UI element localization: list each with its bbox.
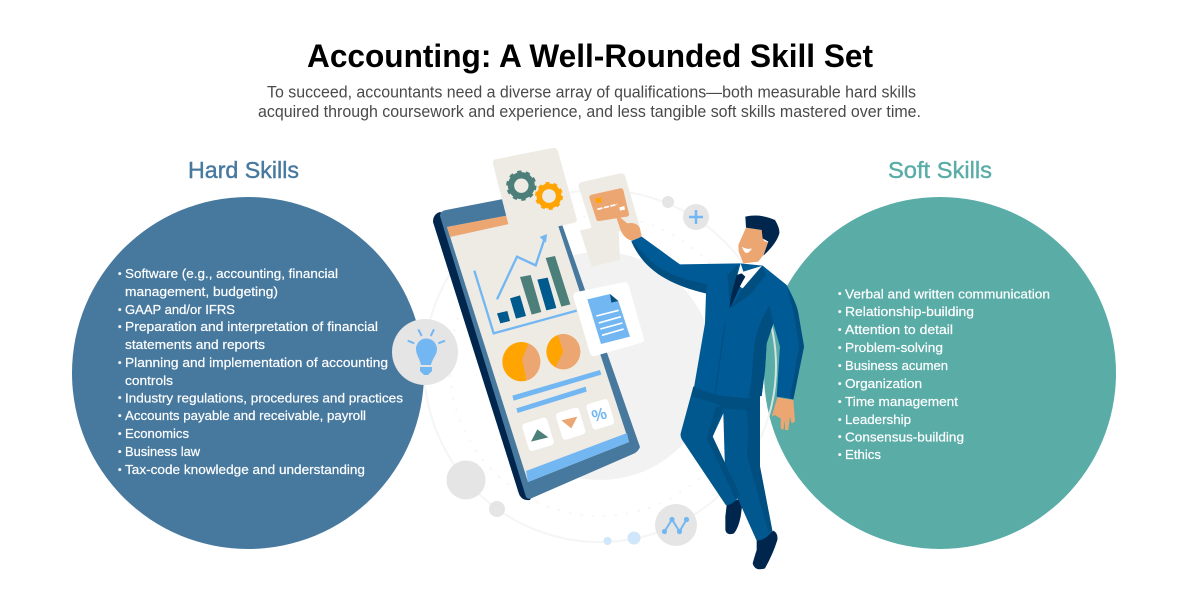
panel: hard skills circle [72,197,424,549]
subtitle: To succeed, accountants need a diverse array of qualifications—both measurable hard skills [267,84,916,102]
legs and shoes [681,387,777,569]
hard skills list: • [118,465,122,476]
hard skills list: • [118,322,122,333]
icon: credit card [589,188,629,221]
phone [433,190,640,500]
panel: soft skills circle [764,197,1116,549]
soft skills list: • [838,307,842,318]
bar chart [474,234,577,333]
hard skills list: • [118,447,122,458]
soft skills list: Consensus-building [845,430,964,444]
soft skills list: • [838,450,842,461]
soft skills list: Organization [845,376,922,391]
hanging hand [772,397,795,430]
hard skills list: • [118,429,122,440]
soft skills list: Time management [845,394,958,409]
shirt and tie [735,263,763,288]
icon: green gear [508,172,535,199]
hard skills list: GAAP and/or IFRS [125,302,235,317]
stat tiles: % [589,404,609,426]
soft skills list: • [838,289,842,300]
decorative nodes [446,196,674,545]
heading: hard skills: Hard Skills [188,157,299,183]
upper body [631,216,804,399]
hard skills list: controls [125,373,174,388]
document tile [573,282,644,356]
soft skills list: Attention to detail [845,322,953,337]
soft skills list: • [838,415,842,426]
hard skills list: Economics [125,426,190,441]
payment card tile [579,173,640,267]
jacket and arms [631,237,804,399]
head [738,228,768,263]
hard skills list [118,266,404,477]
soft skills list: • [838,361,842,372]
title: Accounting: A Well-Rounded Skill Set [307,38,873,74]
soft skills list: Leadership [845,412,911,427]
hard skills list: management, budgeting) [125,284,278,299]
soft skills list: Ethics [845,447,882,462]
floating cards [493,148,644,356]
soft skills list [838,286,1050,462]
soft skills list: • [838,343,842,354]
hard skills list: Industry regulations, procedures and practices [125,390,404,406]
heading: soft skills: Soft Skills [888,157,992,183]
hard skills list: • [118,411,122,422]
text lines [512,370,601,413]
icon: light bulb [392,319,458,385]
soft skills list: Verbal and written communication [845,286,1050,302]
subtitle: acquired through coursework and experience, and less tangible soft skills mastered over time. [258,103,921,121]
hard skills list: • [118,358,122,369]
soft skills list: Business acumen [845,358,948,373]
soft skills list: • [838,432,842,443]
icon: document [587,294,630,344]
phone screen content [474,234,577,333]
pie charts [502,334,580,382]
hard skills list: Accounts payable and receivable, payroll [125,408,366,423]
soft skills list: Relationship-building [845,304,974,319]
pointing hand [617,217,642,241]
hard skills list: Planning and implementation of accounting [125,355,388,370]
icon: line chart node [655,504,697,546]
hard skills list: Software (e.g., accounting, financial [125,266,338,281]
icon: orange gear [536,183,562,209]
soft skills list: • [838,325,842,336]
hard skills list: • [118,305,122,316]
businessman [631,216,804,569]
subtitle [258,84,921,121]
gear card [493,148,577,236]
hard skills list: • [118,269,122,280]
icon: plus node [683,204,709,230]
background orbit rings and blob [424,190,776,542]
hard skills list: Tax-code knowledge and understanding [125,462,365,477]
hard skills list: • [118,393,122,404]
hard skills list: Preparation and interpretation of financial [125,319,378,334]
hard skills list: Business law [125,444,201,459]
soft skills list: Problem-solving [845,340,943,355]
hard skills list: statements and reports [125,337,266,352]
soft skills list: • [838,397,842,408]
soft skills list: • [838,379,842,390]
